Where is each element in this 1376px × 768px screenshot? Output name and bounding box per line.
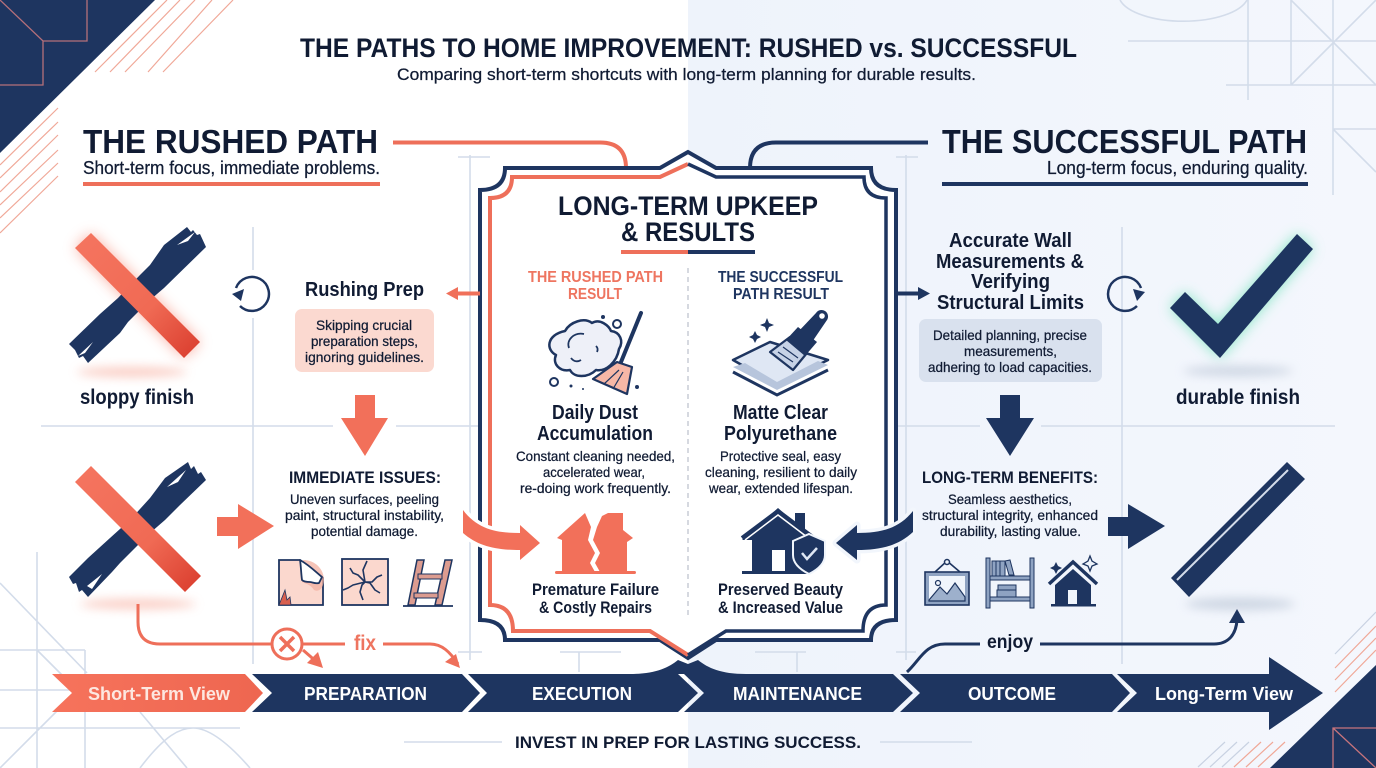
icon: refresh arrow left [232,277,269,311]
connector: rushed heading to panel [393,142,626,168]
arrow: down to immediate issues [341,395,388,456]
label: sloppy finish: sloppy finish [80,386,194,409]
label: rushing prep: Rushing Prep [305,279,424,301]
arrow: curved into panel, rushed side [463,510,540,560]
arrow: panel to rushing prep [446,287,480,300]
icon: sloppy finish cross [69,227,206,377]
callout: skipping prep: ignoring guidelines. [305,349,424,365]
step: preparation: PREPARATION [304,684,427,704]
text: matte clear polyurethane: Matte Clear [733,402,828,424]
step: short-term view [52,674,263,712]
text: premature failure: & Costly Repairs [539,598,652,617]
connector: fix path [138,604,460,668]
column head: successful result [718,269,843,303]
icon: cracked house [555,513,636,574]
heading: the successful path: Long-term focus, enduring quality. [1047,158,1308,178]
heading: the successful path [942,123,1308,186]
callout: detailed planning: adhering to load capacities. [928,359,1092,375]
icon: house with sparkles [1049,556,1097,606]
icon: no-go circle [272,629,302,659]
arrow: benefits to finish [1108,504,1165,549]
column head: rushed result: RESULT [568,286,622,303]
step: long-term view [1117,657,1323,730]
callout: detailed planning: measurements, [964,343,1057,359]
label: accurate wall measurements [936,230,1084,314]
flare joining panel to timeline [630,660,746,674]
column head: successful result: PATH RESULT [733,286,829,303]
icon: level bar [1171,462,1305,610]
connector: successful heading to panel [750,142,928,168]
text: long-term benefits: structural integrity, enhanced [922,507,1098,523]
callout: skipping prep: preparation steps, [311,333,418,349]
text: immediate issues [285,468,444,539]
title: THE PATHS TO HOME IMPROVEMENT: RUSHED vs. SUCCESSFUL [300,33,1077,63]
column head: rushed result [528,269,663,303]
label: fix: fix [354,632,376,655]
label: enjoy: enjoy [987,632,1033,653]
icon: paint brush and sealed sheets [733,310,828,395]
step: execution: EXECUTION [532,684,632,704]
step: preparation [252,674,480,712]
heading: the successful path: THE SUCCESSFUL PATH [942,123,1307,160]
connector: enjoy path [907,609,1245,672]
icon: dust cloud and broom [549,313,641,394]
footer tagline: INVEST IN PREP FOR LASTING SUCCESS. [515,733,861,752]
label: accurate wall measurements: Accurate Wall [949,230,1072,252]
text: long-term benefits [922,468,1098,539]
callout: skipping prep: Skipping crucial [316,317,412,333]
panel heading [558,191,818,254]
arrow: down to long-term benefits [986,395,1034,456]
corner decoration: top left [0,0,233,233]
corner decoration: bottom right [1198,612,1376,768]
column head: successful result: THE SUCCESSFUL [718,269,843,286]
text: matte clear polyurethane: wear, extended lifespan. [708,480,853,496]
callout: detailed planning [919,319,1102,382]
callout: skipping prep [295,309,434,372]
text: daily dust accumulation: Constant cleaning needed, [516,448,675,464]
arrow: curved into panel, successful side [836,511,913,560]
step: short-term view: Short-Term View [88,684,231,704]
label: accurate wall measurements: Verifying [971,271,1050,293]
icon: durable finish check [1170,234,1313,376]
panel: long-term upkeep and results [480,152,896,658]
label: durable finish: durable finish [1176,386,1300,409]
text: premature failure: Premature Failure [532,580,659,599]
text: matte clear polyurethane [705,402,857,496]
subtitle: Comparing short-term shortcuts with long-term planning for durable results. [397,65,976,84]
arrow: cross to immediate issues [217,504,274,549]
step: execution [468,674,698,712]
text: daily dust accumulation: Daily Dust [552,402,638,424]
text: preserved beauty: Preserved Beauty [718,580,843,599]
callout: detailed planning: Detailed planning, precise [933,327,1087,343]
text: immediate issues: IMMEDIATE ISSUES: [289,468,441,487]
step: maintenance: MAINTENANCE [733,684,862,704]
text: preserved beauty [718,580,843,617]
column head: rushed result: THE RUSHED PATH [528,269,663,286]
label: accurate wall measurements: Measurements & [936,251,1084,273]
text: immediate issues: potential damage. [311,523,418,539]
icon: peeling paint [279,560,324,605]
step: maintenance [684,674,913,712]
text: daily dust accumulation [516,402,675,496]
icon: cracked wall [342,559,388,605]
step: outcome: OUTCOME [968,684,1056,704]
heading: the rushed path: Short-term focus, immediate problems. [83,158,380,178]
timeline arrow bar [52,657,1323,730]
text: preserved beauty: & Increased Value [718,598,843,617]
panel heading: LONG-TERM UPKEEP [558,191,818,221]
text: daily dust accumulation: Accumulation [537,423,653,445]
icon: framed picture [925,560,969,605]
text: matte clear polyurethane: Polyurethane [724,423,837,445]
step: outcome [900,674,1130,712]
heading: the rushed path [83,123,380,186]
panel heading: & RESULTS [621,217,755,247]
text: immediate issues: paint, structural instability, [285,507,444,523]
icon: house with shield [742,508,825,574]
text: premature failure [532,580,659,617]
icon: refresh arrow right [1108,277,1145,311]
label: accurate wall measurements: Structural Limits [937,292,1084,314]
panel frame [480,152,896,658]
text: matte clear polyurethane: cleaning, resilient to daily [705,464,857,480]
step: long-term view: Long-Term View [1155,684,1294,704]
text: daily dust accumulation: re-doing work frequently. [520,480,671,496]
text: long-term benefits: durability, lasting value. [940,523,1081,539]
text: long-term benefits: Seamless aesthetics, [948,491,1072,507]
text: long-term benefits: LONG-TERM BENEFITS: [922,468,1098,487]
text: matte clear polyurethane: Protective seal, easy [720,448,841,464]
icon: bookshelf [986,558,1034,608]
text: daily dust accumulation: accelerated wear, [543,464,645,480]
text: immediate issues: Uneven surfaces, peeling [290,491,439,507]
arrow: panel to accurate measurements [897,287,930,300]
heading: the rushed path: THE RUSHED PATH [83,123,378,160]
icon: ladder [403,560,453,606]
icon: second cross [69,462,206,609]
